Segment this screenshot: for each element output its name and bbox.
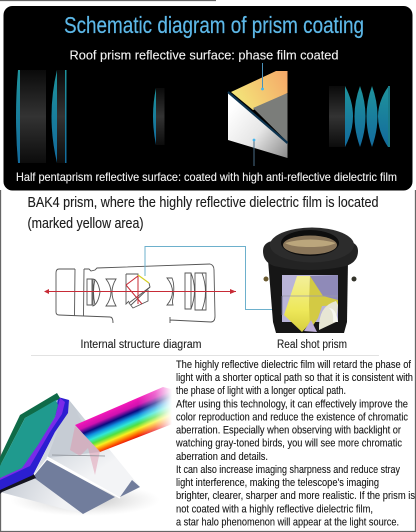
- middle focusing lens: [153, 88, 164, 145]
- text block: coating explanation: aberration and details.: [176, 451, 268, 463]
- prism diagram: [228, 71, 288, 158]
- glass lower face: [0, 476, 83, 514]
- coated front faces: [0, 473, 36, 494]
- prism shadow: [10, 484, 160, 516]
- red optical path: [44, 276, 236, 304]
- glass upper face: [33, 400, 140, 497]
- diagram: internal binocular structure: [56, 264, 215, 323]
- text block: coating explanation: the phase of light with a longer optical path.: [176, 385, 346, 397]
- eyepiece lens group: [329, 86, 390, 147]
- text block: coating explanation: light interference, making the telescope's imaging: [176, 477, 379, 489]
- text block: coating explanation: [175, 359, 415, 528]
- leader line: pentaprism surface: [253, 140, 255, 166]
- photo flange: [263, 241, 358, 270]
- marker dot: roof surface: [261, 88, 264, 90]
- dark base face: [33, 460, 115, 514]
- blue connector line: [145, 246, 284, 310]
- panel: prism coating schematic: [4, 6, 412, 190]
- heading: half pentaprism surface: Half pentaprism reflective surface: coated with high anti-reflective dielectric film: [16, 170, 397, 184]
- marker dot: pentaprism surface: [253, 139, 255, 141]
- caption: internal structure diagram: Internal structure diagram: [80, 339, 202, 351]
- refracted colour smear: [70, 426, 100, 475]
- rainbow beam: [75, 387, 175, 452]
- yellow film marker: [138, 275, 149, 283]
- objective lens group: [16, 70, 66, 163]
- yellow prism facet: [284, 276, 311, 332]
- text block: coating explanation: not coated with a highly reflective dielectric film,: [176, 504, 373, 516]
- caption: real shot prism: Real shot prism: [277, 339, 347, 351]
- heading: roof prism surface: Roof prism reflective surface: phase film coated: [70, 48, 338, 62]
- illustration: dispersing glass prism: [0, 380, 176, 516]
- photo: real shot prism: [263, 228, 358, 333]
- photo eyecup ring: [270, 228, 354, 262]
- leader line: roof surface: [262, 63, 264, 89]
- photo body frame: [268, 260, 348, 333]
- subheading: marked area: (marked yellow area): [28, 216, 144, 232]
